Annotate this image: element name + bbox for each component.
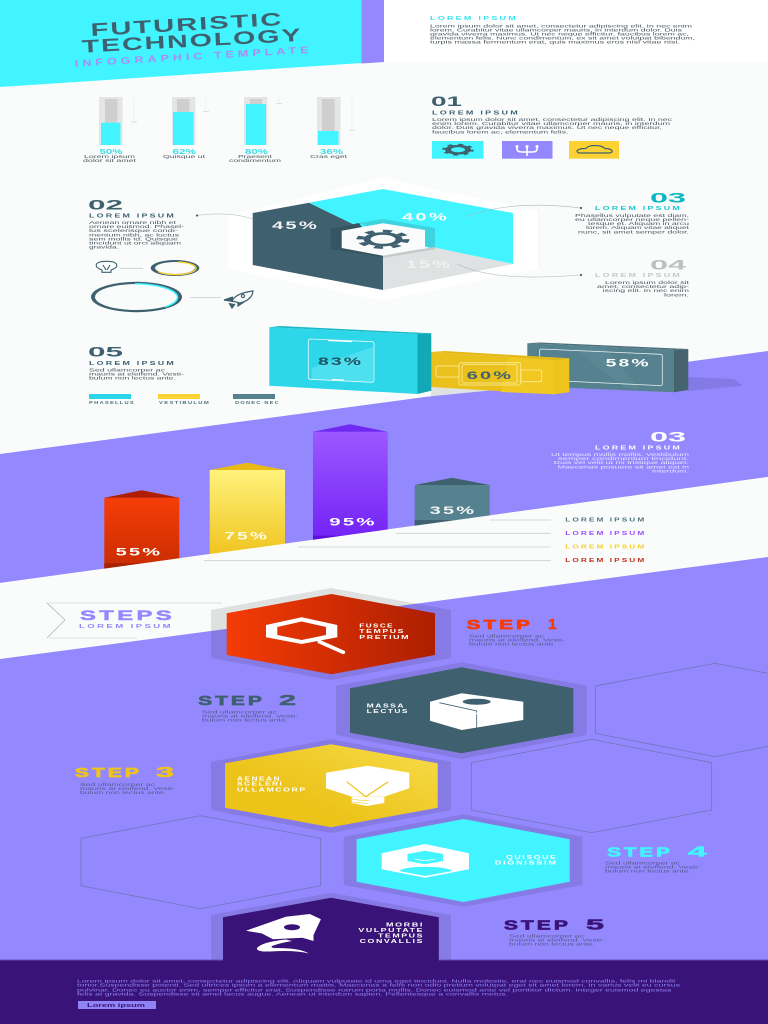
bar value 55%: 55% <box>116 547 162 559</box>
step 4 label: mauris at eleifend. Vesti- <box>605 864 701 869</box>
lower purple background <box>0 557 768 960</box>
section 01 text: faucibus lorem ac, elementum felis. <box>432 129 568 134</box>
step 5 label: Sed ullamcorper ac <box>509 933 585 938</box>
step 1 caption: PRETIUM <box>359 635 410 641</box>
footer text: tortor.Suspendisse potenti. Sed ultrices ipsum a elementum mattis. Maecenas a felis non odio pretium volutpat eget sit amet lorem. In varius velit eu cursus <box>77 983 681 988</box>
section 01 text: enim lorem. Curabitur vitae ullamcorper mauris, in interdum <box>432 121 670 126</box>
intro text block: gravida viverra maximus. Ut nec neque efficitur, faucibus lorem ac, <box>430 31 689 36</box>
leader line to 04 <box>457 264 582 277</box>
section 02 text: Aenean ornare nibh et <box>89 220 177 225</box>
step 4 hexagon <box>344 814 582 907</box>
section 03 text: lorem. Aliquam vitae aliquet <box>586 225 690 230</box>
footer text: pulvinar. Donec eu auctor enim, semper efficitur erat. Suspendisse rutrum porta mollis. Donec euismod ante vel porttitor dictum. Integer euismod egestas <box>77 987 673 992</box>
step 5 label <box>504 916 605 947</box>
icon: pen nib <box>246 914 321 954</box>
section 02 text: tincidunt ut orci aliquam <box>89 240 181 245</box>
bar legend <box>204 518 646 564</box>
steps ribbon: LOREM IPSUM <box>79 624 173 630</box>
step 3 label: STEP <box>75 765 142 780</box>
empty hexagon outlines <box>81 663 768 909</box>
card 58% <box>527 342 688 392</box>
section 02 text: mentum nibh, ac luctus <box>89 232 180 237</box>
leader line to 02 <box>196 214 253 219</box>
step 4 label <box>605 844 708 874</box>
card 58%: 58% <box>606 358 651 370</box>
step 5 label: bulum non lectus ante. <box>509 942 595 947</box>
gauge 62%: Quisque ut <box>163 154 206 159</box>
step 2 hexagon <box>336 662 587 759</box>
footer <box>0 960 768 1024</box>
bar legend: LOREM IPSUM <box>565 518 646 524</box>
section 03 white text: Duis vel velit ut mi tristique aliquet. <box>554 460 689 465</box>
step 2 caption: MASSA <box>367 704 405 710</box>
step 4 label: bulum non lectus ante. <box>605 869 691 874</box>
step 4 caption: QUISQUE <box>506 855 558 861</box>
section 03 white text: semper condimentum tincidunt. <box>558 456 689 461</box>
section 01 text: dolor. Duis gravida viverra maximus. Ut nec neque efficitur, <box>432 125 662 130</box>
step 3 hexagon <box>211 739 451 833</box>
section 03 text: tesque et. Aliquam in arcu <box>588 221 690 226</box>
step 3 caption: SCELERI <box>237 782 283 788</box>
section 01 text: 01 <box>431 93 462 109</box>
segment 45% <box>253 203 383 290</box>
bar 95% <box>313 424 388 544</box>
legend: VESTIBULUM <box>159 400 210 405</box>
bar value 35%: 35% <box>430 505 476 517</box>
gauge 36%: 36% <box>320 149 344 156</box>
icon: connector tile <box>502 141 552 159</box>
intro text block: turpis massa fermentum erat, quis maximus eros nisl vitae nisi. <box>430 40 680 45</box>
section 03 text: LOREM IPSUM <box>595 206 682 212</box>
section 02 text: 02 <box>88 196 123 212</box>
steps ribbon <box>47 603 222 638</box>
step 1 caption: FUSCE <box>359 624 394 630</box>
section 05 text: mauris at eleifend. Vesti- <box>89 372 185 377</box>
bar 75% <box>210 463 285 560</box>
section 04 text: lorem. <box>664 292 689 297</box>
thermometer chart <box>83 97 355 163</box>
footer text: felis at gravida. Suspendisse sit amet lacus augue. Aenean ut interdum sapien. Pellentesque a convallis metus. <box>77 992 508 997</box>
gauge 50% <box>83 97 137 163</box>
step 1 label <box>467 616 566 647</box>
small ring chart <box>120 260 199 276</box>
section 04 text: iscing elit. In nec enim <box>603 288 689 293</box>
section 01 text <box>431 93 673 134</box>
intro text block: lorem. Curabitur vitae ullamcorper mauris, in interdum dolor. Duis <box>430 27 683 32</box>
segment 15% <box>383 248 513 290</box>
step 2 caption: LECTUS <box>367 709 409 715</box>
gauge 50%: 50% <box>100 149 124 156</box>
section 05 text: LOREM IPSUM <box>89 361 176 367</box>
step 5 caption: MORBI <box>386 923 424 929</box>
section 02 text: gravida. <box>89 244 119 249</box>
icon: light bulb <box>96 261 117 272</box>
bar legend: LOREM IPSUM <box>565 531 646 537</box>
icon: person <box>382 844 469 878</box>
step 5 hexagon <box>211 893 451 962</box>
gauge 62%: 62% <box>172 149 197 156</box>
icon: bulb <box>326 766 409 806</box>
section 05 text: bulum non lectus ante. <box>89 376 176 381</box>
section 04 text: 04 <box>650 256 686 272</box>
step 1 label: bulum non lectus ante. <box>469 642 556 647</box>
section 03 text: nunc, sit amet semper dolor. <box>578 229 689 234</box>
intro text block: LOREM IPSUM <box>430 16 518 22</box>
step 2 label: 2 <box>279 692 296 709</box>
step 1 label: mauris at eleifend. Vesti- <box>469 637 566 642</box>
step 3 label: mauris at eleifend. Vesti- <box>80 786 176 791</box>
step 2 caption <box>367 704 409 715</box>
section 03 text: Phasellus vulputate est diam, <box>575 213 689 218</box>
intro text block <box>430 16 695 45</box>
step 1 hexagon <box>211 588 451 680</box>
step 1 caption: TEMPUS <box>359 629 405 635</box>
legend: PHASELLUS <box>89 400 135 405</box>
section 03 white text <box>551 428 690 473</box>
bar value 95%: 95% <box>329 516 377 528</box>
gauge 80%: 80% <box>245 149 269 156</box>
section 02 text: LOREM IPSUM <box>89 213 176 219</box>
gauge 50%: dolor sit amet <box>83 158 137 163</box>
footer button: Lorem ipsum <box>87 1003 145 1009</box>
step 2 label: STEP <box>198 693 265 708</box>
step 5 label: mauris at eleifend. Vesti- <box>509 937 605 942</box>
step 2 label <box>198 692 299 723</box>
step 4 label: 4 <box>688 844 708 861</box>
section 04 text: LOREM IPSUM <box>595 273 682 279</box>
section 01 text: LOREM IPSUM <box>432 110 520 116</box>
section 04 text: amet, consectetur adip- <box>597 284 690 289</box>
gauge 36%: Cras eget <box>310 154 348 159</box>
footer text <box>77 978 681 997</box>
value 15%: 15% <box>406 259 452 271</box>
icon: rocket <box>224 291 253 308</box>
step 5 label: 5 <box>586 916 604 933</box>
hub <box>331 219 435 258</box>
step 2 label: Sed ullamcorper ac <box>202 710 278 715</box>
value 45%: 45% <box>272 220 319 232</box>
bar value 75%: 75% <box>224 530 269 542</box>
bar legend: LOREM IPSUM <box>565 558 646 564</box>
section 03 white text: LOREM IPSUM <box>595 445 682 451</box>
icon: gear <box>360 231 406 248</box>
gauge 36% <box>310 97 355 159</box>
legend: DONEC NEC <box>235 400 280 405</box>
section 03 white text: interdum. <box>652 468 689 473</box>
gauge 80% <box>229 97 282 163</box>
section 03 text: eu ullamcorper neque pellen- <box>575 217 690 222</box>
section 03 white text: Ut tempus mollis mollis. Vestibulum <box>551 452 689 457</box>
card 83% <box>269 326 431 394</box>
gauge 80%: Praesent <box>238 154 273 159</box>
title: FUTURISTIC <box>90 9 284 40</box>
icon: magnifier <box>266 617 343 652</box>
step 4 caption <box>495 855 558 866</box>
step 5 caption: CONVALLIS <box>360 939 424 945</box>
title: TECHNOLOGY <box>81 25 303 57</box>
section 03 text: 03 <box>650 189 686 205</box>
section 01 text: Lorem ipsum dolor sit amet, consectetur adipiscing elit. In nec <box>432 117 673 122</box>
value 40%: 40% <box>402 212 449 224</box>
section 05 text <box>88 344 185 381</box>
step 2 label: mauris at eleifend. Vesti- <box>202 714 299 719</box>
section 04 text: Lorem ipsum dolor sit <box>605 280 690 285</box>
step 4 caption: DIGNISSIM <box>495 860 558 866</box>
step 5 caption: TEMPUS <box>378 933 424 939</box>
gauge 62% <box>163 97 209 159</box>
gauge 50%: Lorem ipsum <box>84 154 135 159</box>
bar 55% <box>104 490 179 574</box>
footer button <box>78 1001 156 1009</box>
step 1 label: 1 <box>548 616 557 633</box>
step 3 caption <box>237 776 307 793</box>
segment 40% <box>309 189 513 264</box>
card 83%: 83% <box>318 356 363 368</box>
icon: phone <box>308 339 374 382</box>
section 03 white text: Maecenas posuere sit amet est in <box>558 464 690 469</box>
steps ribbon: STEPS <box>80 607 175 623</box>
section 05 text: Sed ullamcorper ac <box>89 368 166 373</box>
hexagon chart <box>228 178 539 301</box>
step 4 label: Sed ullamcorper ac <box>605 860 681 865</box>
purple band <box>0 351 768 583</box>
step 3 label: bulum non lectus ante. <box>80 790 166 795</box>
header banner <box>0 0 384 87</box>
section 02 text: sem mollis id. Quisque <box>89 236 179 241</box>
step 3 caption: ULLAMCORP <box>237 787 307 793</box>
step 5 label: STEP <box>504 917 571 932</box>
legend <box>89 394 280 405</box>
step 1 caption <box>359 624 410 641</box>
step 3 label: Sed ullamcorper ac <box>80 782 156 787</box>
step 5 caption <box>358 923 424 945</box>
grey floor <box>431 387 495 396</box>
footer text: Lorem ipsum dolor sit amet, consectetur adipiscing elit. Aliquam vulputate id urna eget tincidunt. Nulla molestie, erat nec euismod convallis, felis mi blandit <box>77 978 677 983</box>
card shadow <box>688 377 743 391</box>
intro text block: elementum felis. Nunc condimentum, ex sit amet volutpat bibendum, <box>430 36 695 41</box>
intro text block: Lorem ipsum dolor sit amet, consectetur adipiscing elit. In nec enim <box>430 23 692 28</box>
section 03 white text: 03 <box>650 428 686 444</box>
subtitle: INFOGRAPHIC TEMPLATE <box>75 45 313 70</box>
section 05 text: 05 <box>88 344 123 360</box>
bar chart <box>104 424 490 574</box>
step 3 label <box>75 764 176 795</box>
bar 35% <box>415 478 490 530</box>
icon: cloud tile <box>569 141 619 159</box>
step 2 label: bulum non lectus ante. <box>202 718 288 723</box>
section 04 text <box>595 256 690 297</box>
step 4 label: STEP <box>607 845 673 860</box>
large ring chart <box>91 282 221 312</box>
card 60% <box>431 351 569 394</box>
white diagonal band <box>0 477 768 659</box>
step 3 caption: AENEAN <box>237 776 281 782</box>
bar legend: LOREM IPSUM <box>565 544 646 550</box>
step 5 caption: VULPUTATE <box>358 928 424 934</box>
gauge 80%: condimentum <box>229 158 281 163</box>
icon: box <box>430 693 523 730</box>
icon: gear tile <box>432 141 484 159</box>
section 02 text: lus scelerisque condi- <box>89 228 179 233</box>
title <box>81 9 303 57</box>
leader line to 03 <box>466 205 582 216</box>
section 02 text: ornare euismod. Phasel- <box>89 224 185 229</box>
step 3 label: 3 <box>156 764 174 781</box>
section 03 text <box>575 189 690 234</box>
step 1 label: STEP <box>467 617 533 632</box>
card 60%: 60% <box>467 370 513 382</box>
section 02 text <box>88 196 185 249</box>
step 1 label: Sed ullamcorper ac <box>469 633 545 638</box>
